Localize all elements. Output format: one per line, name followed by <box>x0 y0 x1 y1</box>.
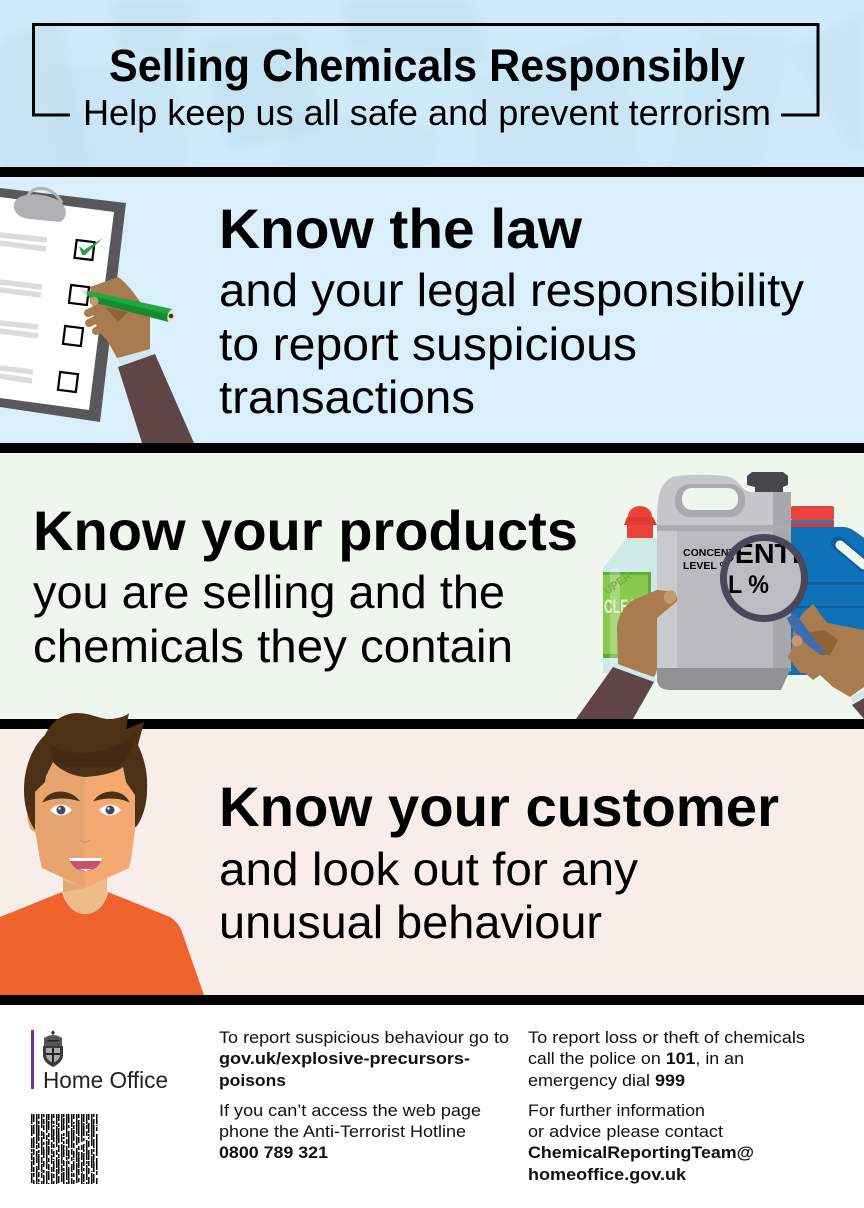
text: report suspicious behaviour: To report suspicious behaviour go to <box>219 1029 509 1047</box>
eyes <box>50 804 72 816</box>
panel: know your products <box>0 453 864 719</box>
text: chemicals: you are selling and the <box>33 566 505 618</box>
heading: know your products: Know your products <box>33 499 578 562</box>
text: anti-terrorist hotline: 0800 789 321 <box>219 1144 328 1162</box>
panel: footer <box>0 1005 864 1208</box>
nose <box>80 840 90 842</box>
text: further information <box>528 1102 754 1184</box>
logo: home office <box>31 1030 168 1093</box>
icon: clipboard <box>0 188 194 443</box>
ear <box>27 815 35 832</box>
text: report loss or theft: emergency dial 999 <box>528 1072 685 1090</box>
text: report loss or theft: To report loss or theft of chemicals <box>528 1029 805 1047</box>
neck <box>63 875 107 914</box>
text: report loss or theft: call the police on 101, in an <box>528 1050 744 1068</box>
mouth <box>69 858 102 871</box>
panel: know the law <box>0 177 864 443</box>
panel: header <box>0 0 864 167</box>
text: further information: ChemicalReportingTeam@ <box>528 1144 754 1162</box>
icon: magnifying glass: L % <box>728 571 769 599</box>
icon: left hand <box>576 588 679 719</box>
dividers <box>0 167 864 1005</box>
icon: tick <box>79 238 103 255</box>
text: unusual behaviour: unusual behaviour <box>219 896 602 948</box>
text: anti-terrorist hotline <box>219 1102 481 1162</box>
face <box>35 762 85 888</box>
text: anti-terrorist hotline: If you can’t access the web page <box>219 1102 481 1120</box>
shirt <box>0 892 204 995</box>
icon: man portrait <box>0 713 204 995</box>
icon: magnifying glass <box>714 538 804 618</box>
icon: grey jug: LEVEL % <box>683 560 730 572</box>
text: report suspicious behaviour <box>219 1029 509 1090</box>
heading: know your customer: Know your customer <box>219 775 779 838</box>
icon: green bottle: UPER <box>602 570 634 598</box>
icon: grey jug <box>657 472 791 690</box>
text: further information: or advice please contact <box>528 1123 723 1141</box>
text: report loss or theft <box>528 1029 805 1090</box>
heading: know the law: Know the law <box>219 197 582 260</box>
panel: know your customer <box>0 729 864 995</box>
text: further information: homeoffice.gov.uk <box>528 1166 687 1184</box>
subtitle: Help keep us all safe and prevent terrorism <box>83 92 771 133</box>
text: report suspicious behaviour: poisons <box>219 1072 286 1090</box>
text: further information: For further information <box>528 1102 705 1120</box>
icon: blue bottle <box>780 506 864 675</box>
logo: home office: Home Office <box>43 1067 168 1093</box>
icon: hand with pencil <box>79 277 194 443</box>
text: legal responsibility <box>219 264 804 423</box>
eyebrows <box>44 792 78 801</box>
icon: royal crest <box>43 1030 63 1067</box>
text: unusual behaviour: and look out for any <box>219 843 638 895</box>
hair <box>24 713 147 830</box>
text: legal responsibility: transactions <box>219 371 475 423</box>
icon: magnifying glass: CENTI <box>714 538 800 569</box>
text: chemicals <box>33 566 513 672</box>
text: report suspicious behaviour: gov.uk/explosive-precursors- <box>219 1050 470 1068</box>
text: legal responsibility: to report suspicious <box>219 318 637 370</box>
icon: green bottle <box>602 506 660 675</box>
text: chemicals: chemicals they contain <box>33 620 513 672</box>
icon: green bottle: CLEAN <box>604 597 646 618</box>
text: anti-terrorist hotline: phone the Anti-Terrorist Hotline <box>219 1123 466 1141</box>
text: legal responsibility: and your legal responsibility <box>219 264 804 316</box>
icon: right hand <box>787 604 864 719</box>
title frame <box>34 24 818 115</box>
label text: CONCENT <box>683 547 736 559</box>
text: unusual behaviour <box>219 843 638 948</box>
title: Selling Chemicals Responsibly <box>109 40 745 91</box>
qr code <box>31 1114 98 1184</box>
